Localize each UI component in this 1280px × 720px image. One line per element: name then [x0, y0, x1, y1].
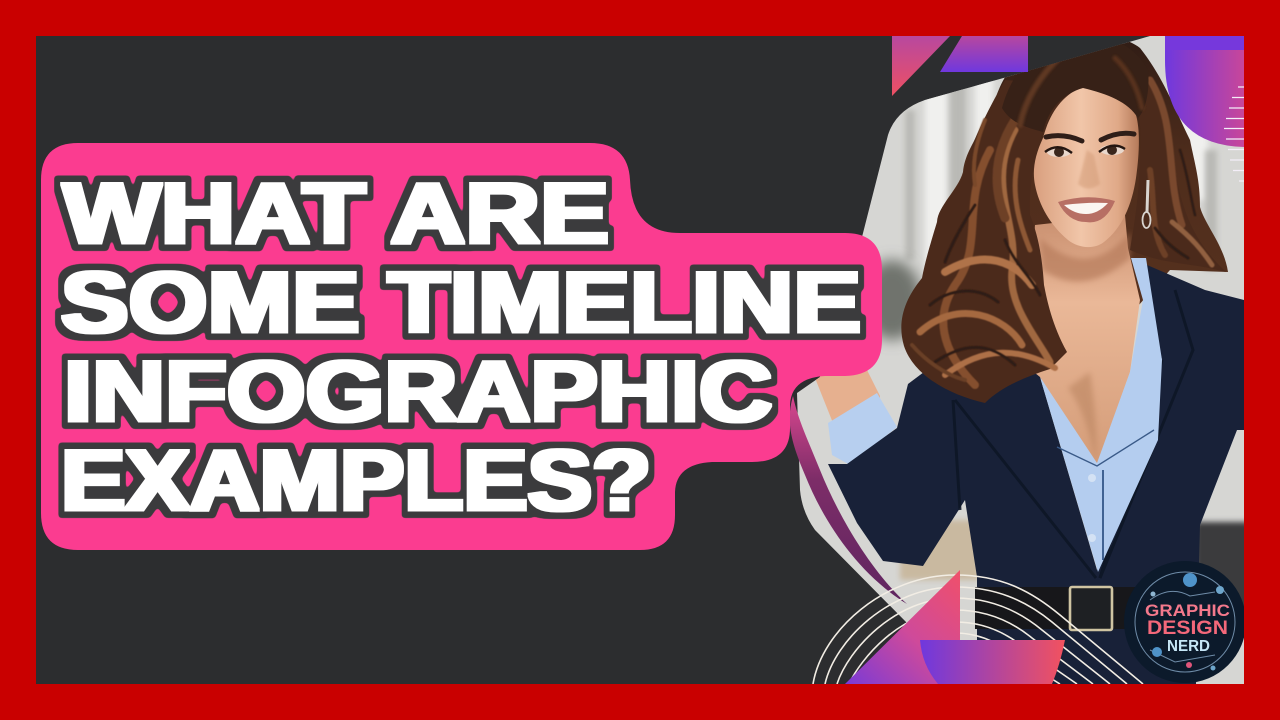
woman's raised hand [816, 370, 880, 420]
title text: SOME TIMELINE [61, 255, 861, 351]
logo text: GRAPHIC [1145, 601, 1230, 620]
top triangle [892, 36, 950, 96]
eyebrows [1046, 133, 1134, 141]
shadow under chin [1040, 232, 1130, 282]
shirt placket and buttons [1057, 430, 1154, 560]
face [1034, 86, 1139, 247]
concentric white arcs [813, 575, 1143, 684]
title text: INFOGRAPHIC [64, 344, 772, 440]
logo circuit rings [1135, 572, 1235, 672]
hair back [927, 42, 1228, 380]
blue shirt [1040, 258, 1162, 572]
neck and chest [1034, 216, 1140, 463]
title text [61, 166, 861, 529]
nose [1078, 150, 1100, 188]
right hair strands [1150, 80, 1212, 265]
bottom pink triangle [845, 570, 960, 684]
earring [1142, 180, 1150, 228]
title text: EXAMPLES? [61, 433, 651, 529]
pink title blob [41, 143, 882, 550]
hair top parting [1002, 35, 1149, 132]
top parallelogram [940, 36, 1028, 72]
top hair highlights [1020, 55, 1142, 125]
mouth [1058, 197, 1115, 222]
jacket lapel shading [953, 290, 1193, 578]
shirt cuff [828, 393, 897, 465]
logo nodes [1150, 573, 1224, 670]
cleavage shading [1069, 374, 1096, 446]
logo badge [1124, 561, 1246, 683]
belt buckle [1070, 587, 1112, 630]
curved swoosh [790, 396, 907, 604]
jacket [828, 262, 1244, 684]
top-right strip [1177, 36, 1244, 50]
hair strands [912, 100, 1055, 385]
hair right side [1130, 86, 1226, 272]
logo text [1145, 601, 1230, 655]
top-right purple semicircle [1165, 50, 1244, 147]
portrait photo panel [790, 34, 1255, 686]
eyes [1045, 145, 1125, 157]
hair left curls [901, 80, 1085, 403]
bottom boat shape [920, 640, 1065, 684]
title text: WHAT ARE [63, 166, 609, 262]
logo text: NERD [1167, 638, 1210, 655]
photo backdrop [790, 36, 1255, 686]
belt [975, 587, 1137, 629]
logo text: DESIGN [1147, 617, 1228, 639]
top-right white tick marks [1224, 87, 1244, 181]
